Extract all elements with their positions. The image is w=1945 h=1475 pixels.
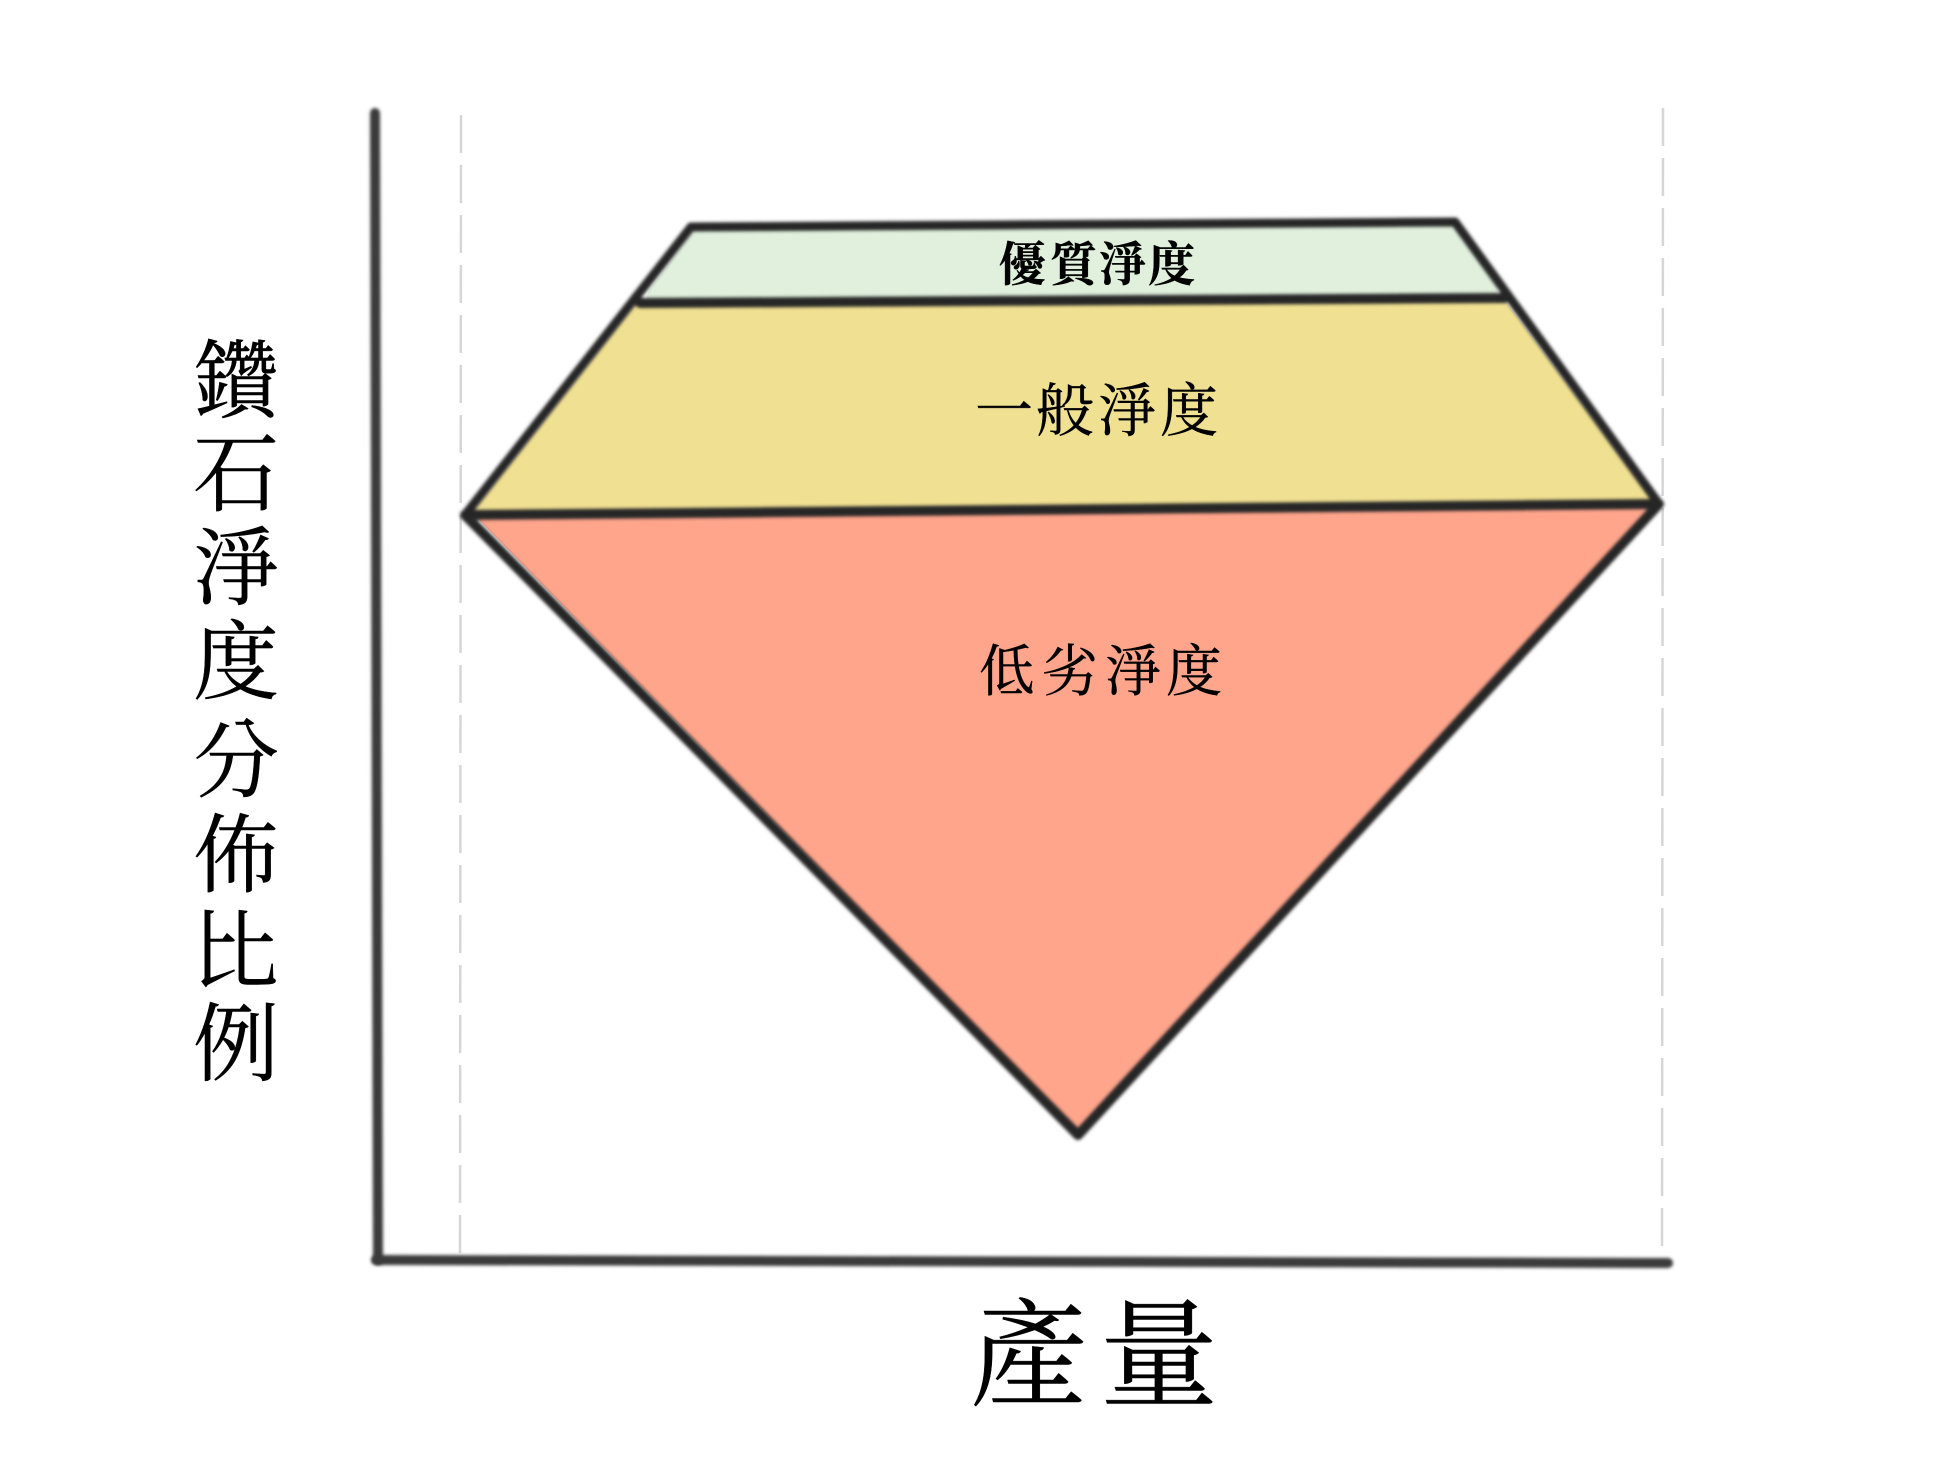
label: medium clarity: 一般淨度 — [975, 379, 1218, 444]
tier: medium clarity region — [470, 298, 1656, 515]
tier: low clarity region — [476, 506, 1655, 1133]
diamond — [465, 222, 1659, 1135]
y axis title: 鑽石淨度分佈比例 — [193, 334, 283, 1093]
label: low clarity: 低劣淨度 — [979, 642, 1222, 704]
x axis — [376, 1260, 1668, 1263]
tier: high clarity region — [647, 224, 1498, 302]
diamond outline — [465, 222, 1659, 1135]
label: high clarity: 優質淨度 — [999, 240, 1195, 292]
x axis title: 產量 — [970, 1292, 1218, 1423]
y axis — [375, 113, 378, 1260]
